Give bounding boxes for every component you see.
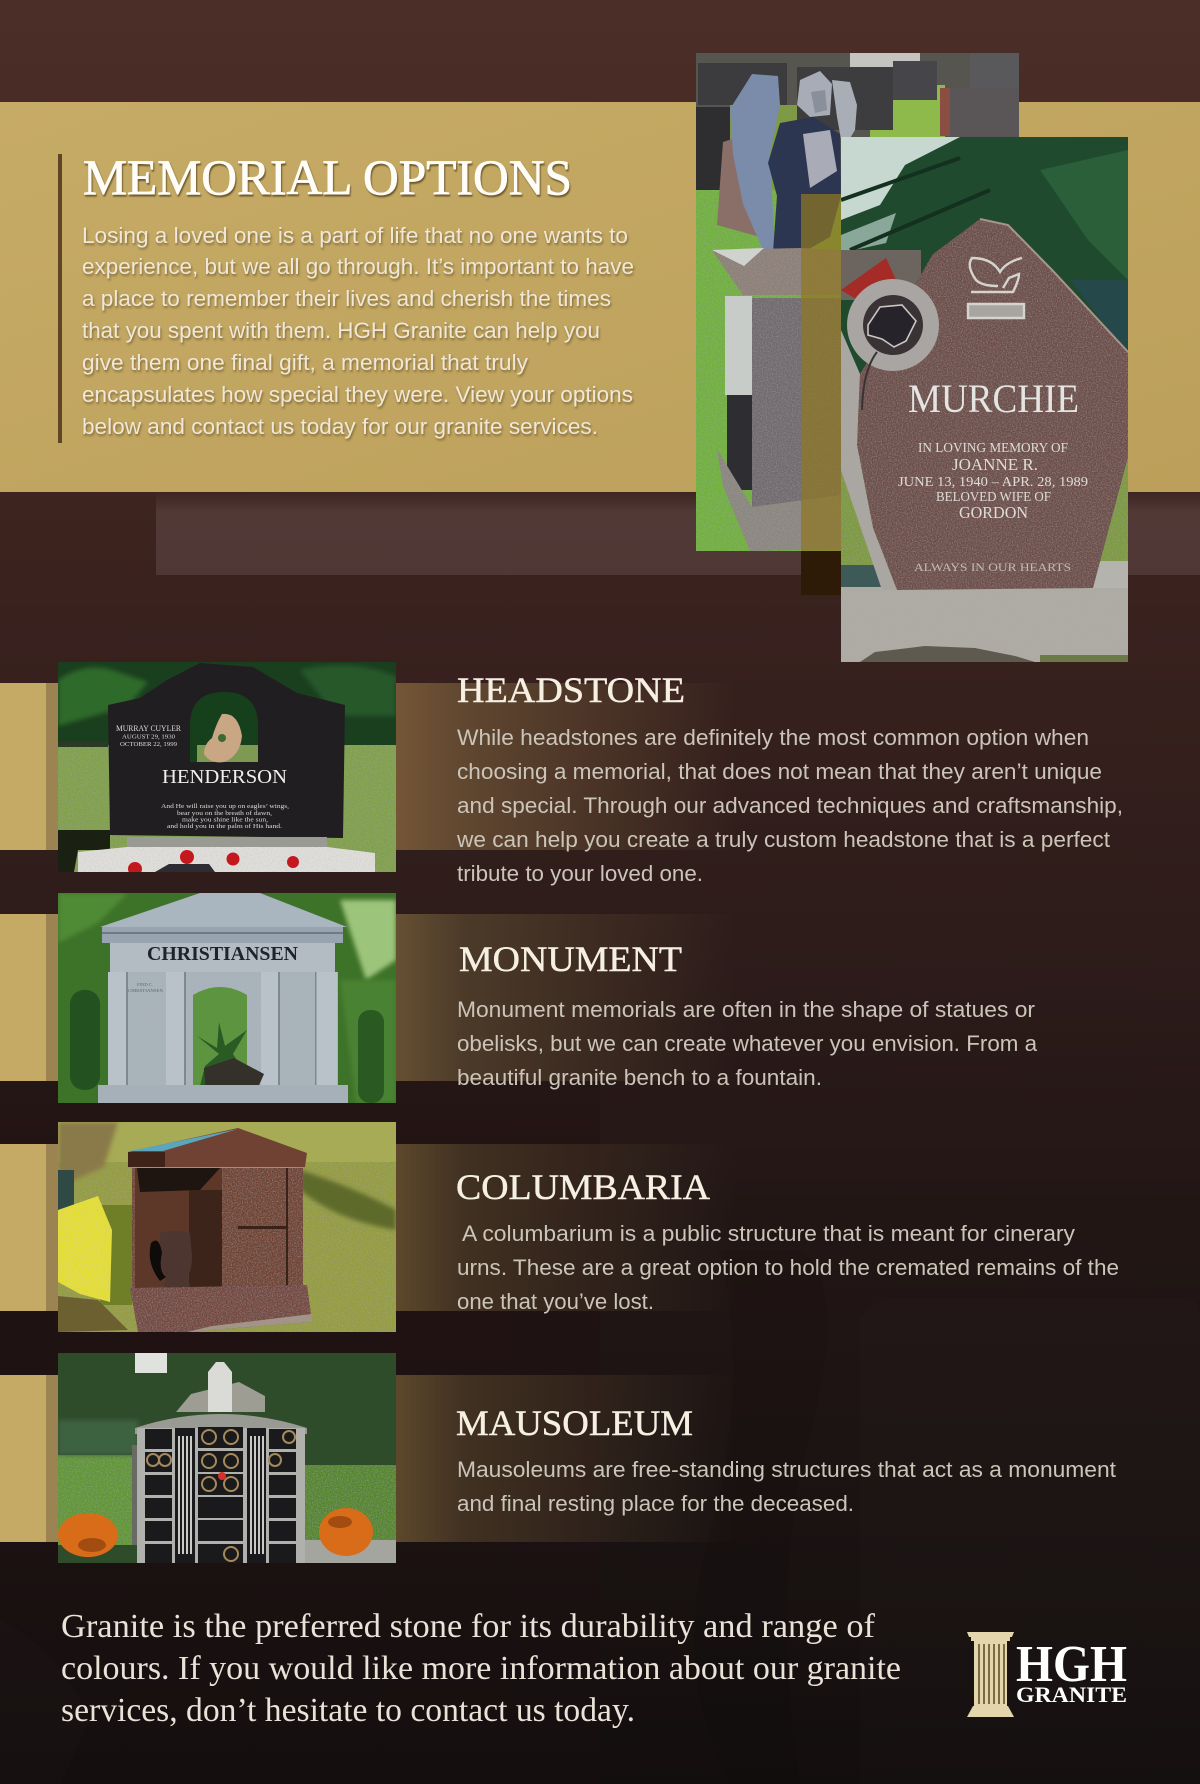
photo: mausoleum: [58, 1353, 396, 1563]
description: beautiful granite bench to a fountain.: [457, 1065, 822, 1090]
photo: Murchie headstone: [841, 137, 1128, 662]
photo: columbaria: [58, 1122, 396, 1332]
intro paragraph: encapsulates how special they were. View your options: [82, 382, 633, 407]
option strip: headstone: [0, 683, 736, 850]
headstone inscription: AUGUST 29, 1930: [122, 734, 175, 740]
closing statement: Granite is the preferred stone for its durability and range of: [61, 1608, 876, 1645]
intro paragraph: Losing a loved one is a part of life that no one wants to: [82, 223, 628, 248]
monument inscription: FIND C.: [137, 982, 153, 987]
description: [457, 1221, 1119, 1314]
headstone inscription: [116, 723, 289, 830]
description: urns. These are a great option to hold the cremated remains of the: [457, 1255, 1119, 1280]
engraved lamp symbol: [968, 258, 1024, 318]
closing statement: [61, 1608, 901, 1729]
monument inscription: CHRISTIANSEN: [128, 988, 164, 993]
description: and special. Through our advanced techniques and craftsmanship,: [457, 793, 1123, 818]
description: and final resting place for the deceased.: [457, 1491, 854, 1516]
title: MEMORIAL OPTIONS: [83, 149, 572, 205]
headstone inscription: and hold you in the palm of His hand.: [167, 823, 282, 830]
section: headstone: [456, 670, 1123, 886]
gold overlay strip: [801, 194, 841, 595]
description: one that you’ve lost.: [457, 1289, 654, 1314]
monument inscription: CHRISTIANSEN: [147, 943, 299, 965]
heading: MONUMENT: [459, 939, 682, 979]
headstone inscription: [898, 376, 1088, 574]
intro paragraph: give them one final gift, a memorial that truly: [82, 350, 528, 375]
closing statement: colours. If you would like more information about our granite: [61, 1650, 901, 1687]
closing statement: services, don’t hesitate to contact us today.: [61, 1692, 635, 1729]
heading: COLUMBARIA: [456, 1167, 710, 1207]
description: Mausoleums are free-standing structures that act as a monument: [457, 1457, 1116, 1482]
grey backing panel: [156, 492, 1200, 575]
headstone inscription: ALWAYS IN OUR HEARTS: [914, 560, 1071, 574]
headstone inscription: MURCHIE: [908, 376, 1079, 421]
headstone inscription: HENDERSON: [162, 766, 287, 788]
description: tribute to your loved one.: [457, 861, 703, 886]
headstone inscription: GORDON: [959, 503, 1028, 522]
description: Monument memorials are often in the shape of statues or: [457, 997, 1035, 1022]
section: monument: [457, 939, 1038, 1090]
description: obelisks, but we can create whatever you envision. From a: [457, 1031, 1038, 1056]
intro paragraph: [82, 223, 634, 439]
headstone inscription: JOANNE R.: [952, 455, 1038, 474]
description: [457, 1457, 1116, 1516]
option strip: monument: [0, 914, 736, 1081]
gold banner: [0, 102, 1200, 492]
heading: HEADSTONE: [457, 670, 685, 710]
option strip: columbaria: [0, 1144, 736, 1311]
monument inscription: [128, 947, 298, 992]
accent bar: [58, 154, 62, 443]
intro paragraph: experience, but we all go through. It’s important to have: [82, 254, 634, 279]
option strip: mausoleum: [0, 1375, 736, 1542]
description: we can help you create a truly custom headstone that is a perfect: [456, 827, 1110, 852]
photo: Henderson headstone: [58, 662, 396, 876]
description: A columbarium is a public structure that is meant for cinerary: [462, 1221, 1075, 1246]
intro paragraph: below and contact us today for our granite services.: [82, 414, 598, 439]
intro block: [58, 149, 634, 443]
icon: column: [967, 1632, 1014, 1717]
heading: MAUSOLEUM: [456, 1403, 693, 1443]
headstone inscription: bear you on the breath of dawn,: [177, 810, 272, 817]
logo: HGH Granite: [967, 1632, 1127, 1717]
logo: HGH Granite: GRANITE: [1016, 1682, 1127, 1707]
description: [457, 997, 1038, 1090]
photo: angel monument: [696, 53, 1019, 551]
headstone inscription: BELOVED WIFE OF: [936, 490, 1051, 505]
headstone inscription: JUNE 13, 1940 – APR. 28, 1989: [898, 475, 1088, 490]
section: mausoleum: [456, 1403, 1116, 1516]
intro paragraph: a place to remember their lives and cherish the times: [82, 286, 611, 311]
photo: Christiansen monument: [58, 893, 396, 1103]
headstone inscription: OCTOBER 22, 1999: [120, 741, 177, 748]
intro paragraph: that you spent with them. HGH Granite can help you: [82, 318, 600, 343]
section: columbaria: [456, 1167, 1119, 1314]
wordmark: HGH: [1016, 1636, 1127, 1693]
description: choosing a memorial, that does not mean that they aren’t unique: [457, 759, 1102, 784]
headstone inscription: make you shine like the sun,: [182, 816, 268, 824]
headstone inscription: IN LOVING MEMORY OF: [918, 441, 1068, 456]
headstone inscription: MURRAY CUYLER: [116, 723, 181, 733]
description: While headstones are definitely the most common option when: [457, 725, 1089, 750]
headstone inscription: And He will raise you up on eagles’ wings,: [161, 803, 289, 810]
description: [456, 725, 1123, 886]
